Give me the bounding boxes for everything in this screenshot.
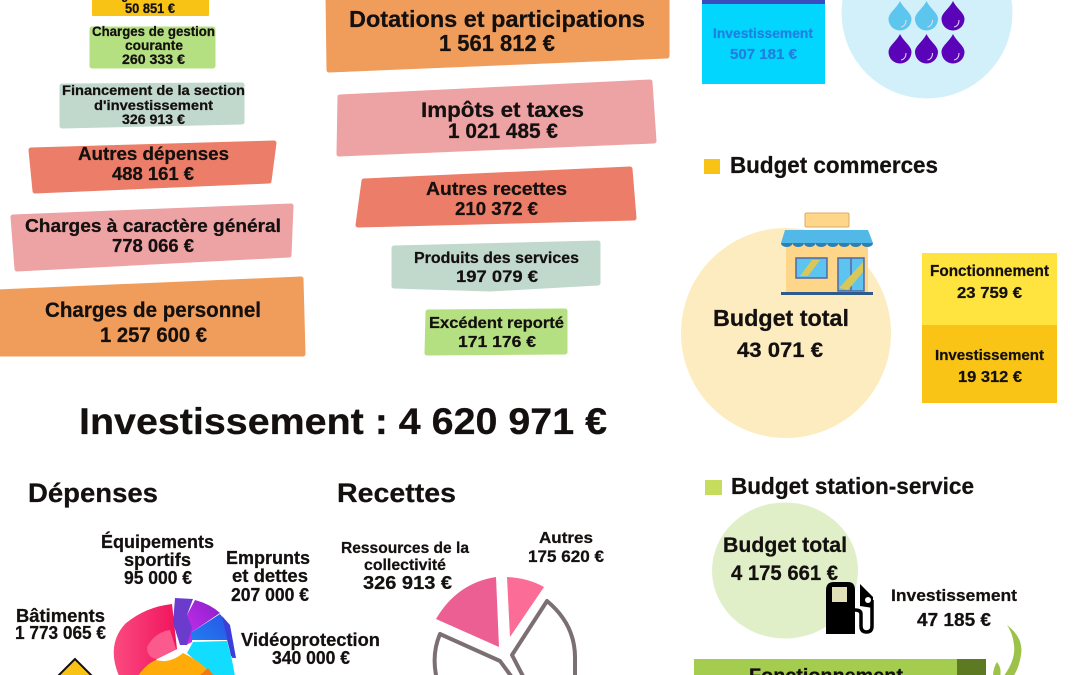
bar: charges de gestion courante: 260 333 € [122,51,185,67]
bar: charges de personnel [0,279,303,354]
label: vidéoprotection: Vidéoprotection [241,630,380,650]
slice: ressources de la collectivité [436,577,499,647]
label: ressources de la collectivité: Ressources de la [341,540,469,557]
bar: produits des services: 197 079 € [456,267,539,286]
icon: shop [781,213,873,295]
bar: charges de gestion courante [92,23,215,67]
panel: fonctionnement recettes pyramid [328,0,667,353]
bar: autres dépenses [31,143,274,191]
text: investissement station [891,586,1017,630]
bar: dotations et participations: Dotations et participations [349,6,645,32]
bar: autres recettes [358,169,634,225]
segment: équipements sportifs [173,598,193,645]
bar: dotations et participations [328,0,667,70]
label: autres [528,530,605,566]
label: bâtiments [15,606,106,643]
label: vidéoprotection: 340 000 € [272,648,350,668]
box: investissement eau: 507 181 € [730,46,798,63]
panel: budget eau [702,0,1012,98]
label: autres: 175 620 € [528,547,605,566]
label: bâtiments: Bâtiments [16,606,105,626]
circle: budget total [681,228,891,438]
bar: charges financières [92,0,209,16]
heading: recettes: Recettes [337,478,456,508]
panel: budget commerces total [681,213,1057,438]
bar: charges à caractère général [13,206,291,269]
box: investissement commerces: Investissement [935,347,1044,364]
label: vidéoprotection [241,630,380,668]
bar: autres dépenses: 488 161 € [112,164,194,184]
bar: excédent reporté [427,311,565,353]
box: investissement eau: Investissement [713,25,813,41]
bar: financement de la section d'investissement: Financement de la section [62,82,245,98]
bar: charges de personnel: 1 257 600 € [100,324,207,347]
label: autres: Autres [539,530,593,547]
bar: autres recettes: 210 372 € [455,199,538,219]
circle: budget total [712,502,858,638]
label: ressources de la collectivité: 326 913 € [363,573,452,593]
label: ressources de la collectivité: collectivité [364,557,446,574]
box: fonctionnement commerces: 23 759 € [957,285,1022,302]
segment: orange [138,653,208,675]
text: investissement station: 47 185 € [917,610,991,630]
label: emprunts et dettes: et dettes [232,566,308,586]
bar: dotations et participations: 1 561 812 € [439,30,555,56]
title: investissement: Investissement : 4 620 971 € [79,401,607,442]
segment: cyan [187,641,235,675]
bar: charges financières: 50 851 € [125,0,175,16]
label: emprunts et dettes: 207 000 € [231,585,309,605]
bar: impôts et taxes: Impôts et taxes [421,99,584,122]
bar: autres dépenses: Autres dépenses [78,144,229,164]
bar: charges de gestion courante: Charges de gestion [92,23,215,39]
bar: charges de personnel: Charges de personnel [45,299,261,322]
text: budget total station: Budget total [723,534,847,557]
heading: budget station-service: Budget station-service [731,473,974,499]
slice: right outline [512,601,575,675]
text: investissement station: Investissement [891,586,1017,605]
box: investissement commerces: 19 312 € [958,369,1022,386]
bar: produits des services: Produits des services [414,250,579,267]
text: budget total station: 4 175 661 € [731,562,838,585]
label: équipements sportifs: sportifs [124,550,191,570]
text: budget total commerces: Budget total [713,305,849,331]
heading: budget commerces: Budget commerces [730,152,938,178]
segment: bâtiments [114,604,177,675]
panel: budget station-service total [694,502,1021,675]
text: budget total commerces: 43 071 € [737,339,823,362]
segment: vidéoprotection [192,614,236,658]
bar: financement de la section d'investissement [62,82,245,127]
bar: impôts et taxes [339,82,654,154]
icon: green leaf [993,625,1021,675]
box: investissement commerces [922,325,1057,403]
icon: water drops [888,1,964,64]
bar: autres recettes: Autres recettes [426,179,567,199]
label: équipements sportifs: 95 000 € [124,568,192,588]
bar: charges de gestion courante: courante [125,37,183,53]
chart: dépenses donut [114,598,236,675]
bar: charges à caractère général: Charges à caractère général [25,216,281,236]
slice: left outline [435,634,514,675]
label: équipements sportifs: Équipements [101,531,214,552]
bar: excédent reporté: Excédent reporté [429,315,564,332]
bar: financement de la section d'investissement: 326 913 € [122,111,185,127]
label: bâtiments: 1 773 065 € [15,623,106,643]
label: emprunts et dettes: Emprunts [226,548,310,568]
text: budget total commerces [713,305,849,362]
bar: financement de la section d'investissement: d'investissement [94,97,213,113]
icon: fuel pump [826,582,873,634]
heading: dépenses: Dépenses [28,478,158,508]
bar: produits des services [394,243,598,289]
text: budget total station [723,534,847,585]
box: fonctionnement commerces: Fonctionnement [930,263,1050,280]
bar: fonctionnement station [694,659,986,675]
icon: yellow diamond marker [57,659,93,675]
bar: excédent reporté: 171 176 € [458,334,536,351]
panel: fonctionnement dépenses pyramid [0,0,303,354]
circle: budget total background [842,0,1012,98]
box: investissement eau [702,0,825,84]
segment: emprunts [186,600,220,645]
label: ressources de la collectivité [341,540,469,593]
label: emprunts et dettes [226,548,310,605]
chart: recettes pie [435,577,575,675]
bar: charges à caractère général: 778 066 € [112,236,194,256]
box: fonctionnement commerces [922,253,1057,325]
bar: impôts et taxes: 1 021 485 € [448,120,558,143]
label: équipements sportifs [101,531,214,588]
slice: autres [507,577,544,637]
